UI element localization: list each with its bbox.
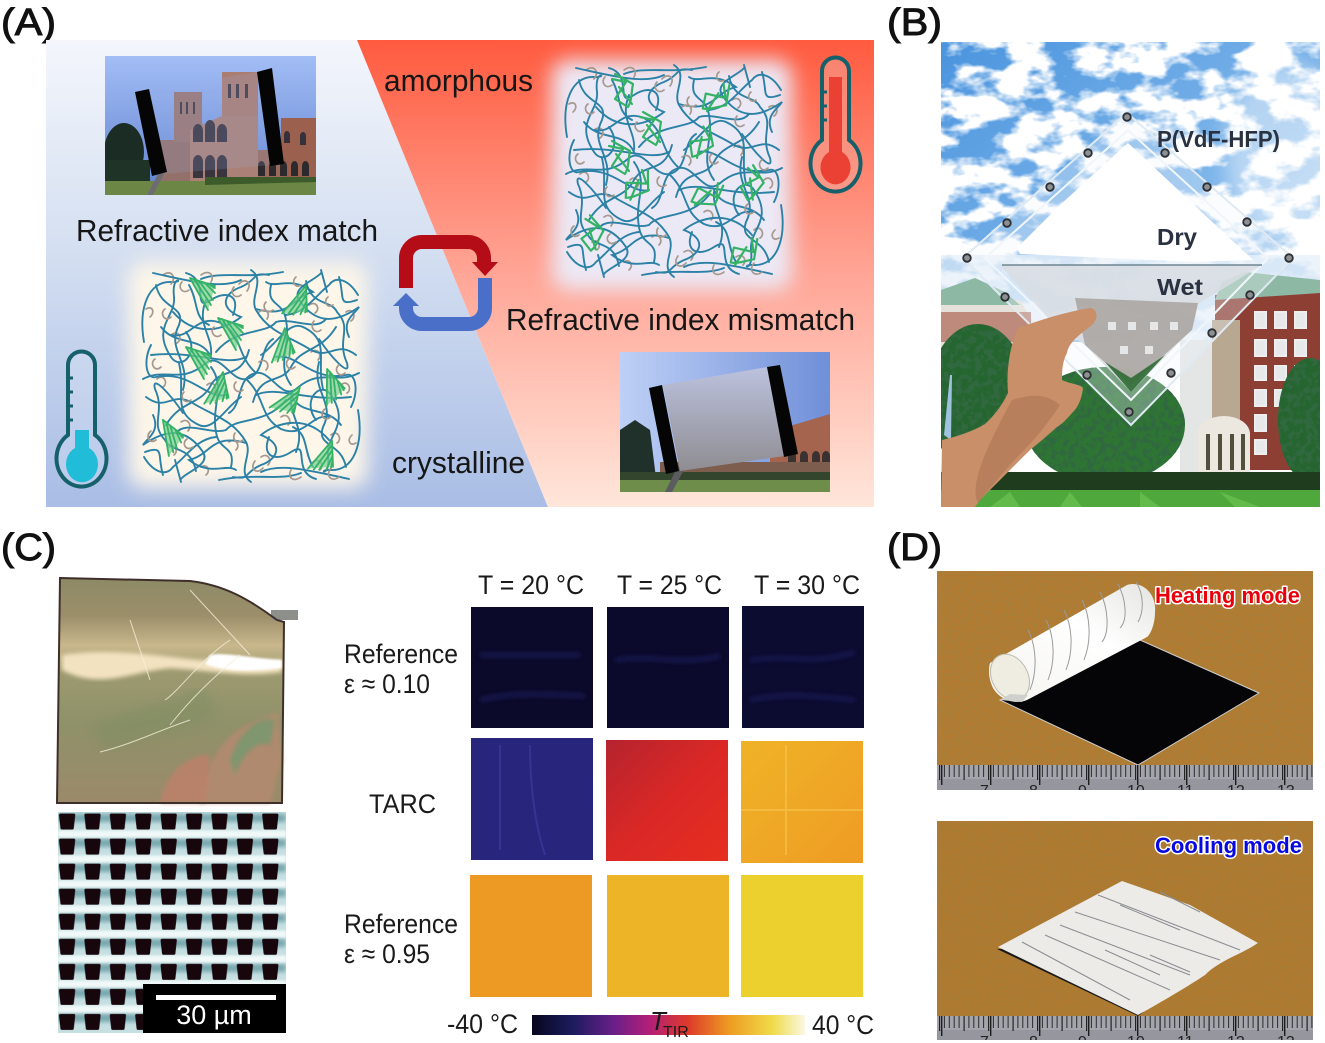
column header: T = 25 °C: T = 25 °C <box>617 570 722 600</box>
glow behind crystalline network <box>128 262 368 488</box>
glow behind amorphous network <box>552 60 792 290</box>
icon: hot thermometer <box>810 58 861 192</box>
panel label: C: (C) <box>1 527 56 569</box>
label: Heating mode: Heating mode <box>1155 583 1300 608</box>
label: Wet: Wet <box>1157 274 1203 300</box>
ruler: 12 <box>1227 783 1245 800</box>
panel label: B: (B) <box>887 2 942 44</box>
hand <box>941 308 1097 507</box>
label: Refractive index match: Refractive index match <box>76 213 378 248</box>
ruler: 13 <box>1277 783 1295 800</box>
ruler: 11 <box>1177 783 1194 800</box>
acrylic diamond frame <box>963 113 1293 425</box>
ruler: 7 <box>980 783 989 800</box>
label: Cooling mode: Cooling mode <box>1155 833 1302 858</box>
row label: Reference emissivity 0.10: ε ≈ 0.10 <box>344 669 430 699</box>
TARC row <box>471 738 863 863</box>
row label: Reference emissivity 0.95 <box>344 909 458 969</box>
label: Refractive index mismatch: Refractive index mismatch <box>506 302 855 337</box>
photo: frosted film in front of building <box>620 352 830 492</box>
black sheet <box>1000 640 1259 765</box>
panel D: heating mode photo <box>937 571 1313 800</box>
cork texture <box>937 571 1313 765</box>
ruler <box>937 1016 1313 1040</box>
cork texture <box>937 821 1313 1040</box>
row label: Reference emissivity 0.95: ε ≈ 0.95 <box>344 939 430 969</box>
reference 0.95 row <box>470 875 863 997</box>
reference 0.10 row <box>471 606 864 728</box>
label: Dry: Dry <box>1157 224 1197 250</box>
frame bolts <box>963 113 1293 416</box>
label: P(VdF-HFP): P(VdF-HFP) <box>1157 126 1280 152</box>
panel C: tunable metasurface and thermal images <box>57 570 874 1041</box>
arrow: heating direction (red) <box>406 242 498 288</box>
row label: TARC: TARC <box>369 789 436 819</box>
column header: T = 30 °C: T = 30 °C <box>754 570 860 600</box>
panel label: D: (D) <box>887 527 942 569</box>
ruler: 10 <box>1127 783 1145 800</box>
background: amorphous side <box>357 40 874 507</box>
polymer network: amorphous state <box>565 65 783 277</box>
background: crystalline side <box>46 40 548 507</box>
cork background <box>937 821 1313 1016</box>
cork background <box>937 571 1313 765</box>
trees <box>941 324 1320 472</box>
ruler <box>937 765 1313 790</box>
photo: clear film in front of building <box>104 56 316 195</box>
polymer network: crystalline state <box>142 270 360 482</box>
flag <box>944 375 952 440</box>
panel D: cooling mode photo <box>937 821 1313 1043</box>
ruler: 9 <box>1078 783 1087 800</box>
wet film area (transparent) <box>1000 265 1262 392</box>
white rolled film <box>983 582 1155 707</box>
row label: Reference emissivity 0.10: Reference <box>344 639 458 669</box>
icon: cold thermometer <box>57 352 107 487</box>
panel label: A: (A) <box>1 2 56 44</box>
panel A: refractive index switching schematic <box>46 40 874 507</box>
scale bar: 30 µm <box>143 984 286 1033</box>
micrograph: hole array <box>58 812 286 1033</box>
photo: iridescent film <box>57 578 298 803</box>
colour bar legend: TIR <box>663 1024 689 1041</box>
hand shading <box>976 396 1060 503</box>
row label: Reference emissivity 0.10 <box>344 639 458 699</box>
buildings <box>941 272 1320 475</box>
hedge and lawn <box>941 472 1320 507</box>
scale bar: 30 µm: 30 µm <box>176 1000 252 1030</box>
dry film area (opaque white) <box>1017 143 1253 262</box>
panel B: P(VdF-HFP) film photo <box>928 42 1325 507</box>
ruler: 8 <box>1029 783 1038 800</box>
column header: T = 20 °C: T = 20 °C <box>478 570 584 600</box>
colour bar legend: -40 °C <box>447 1009 518 1039</box>
colour bar legend <box>447 1006 874 1041</box>
label: amorphous: amorphous <box>384 63 533 98</box>
white flat film <box>997 881 1258 1016</box>
thermal image grid <box>470 606 864 997</box>
label: crystalline: crystalline <box>392 445 525 480</box>
colour bar legend: T <box>650 1006 668 1036</box>
row label: Reference emissivity 0.95: Reference <box>344 909 458 939</box>
arrow: cooling direction (blue) <box>393 278 485 324</box>
sky with clouds <box>941 42 1325 342</box>
colour bar legend: 40 °C <box>812 1010 874 1040</box>
